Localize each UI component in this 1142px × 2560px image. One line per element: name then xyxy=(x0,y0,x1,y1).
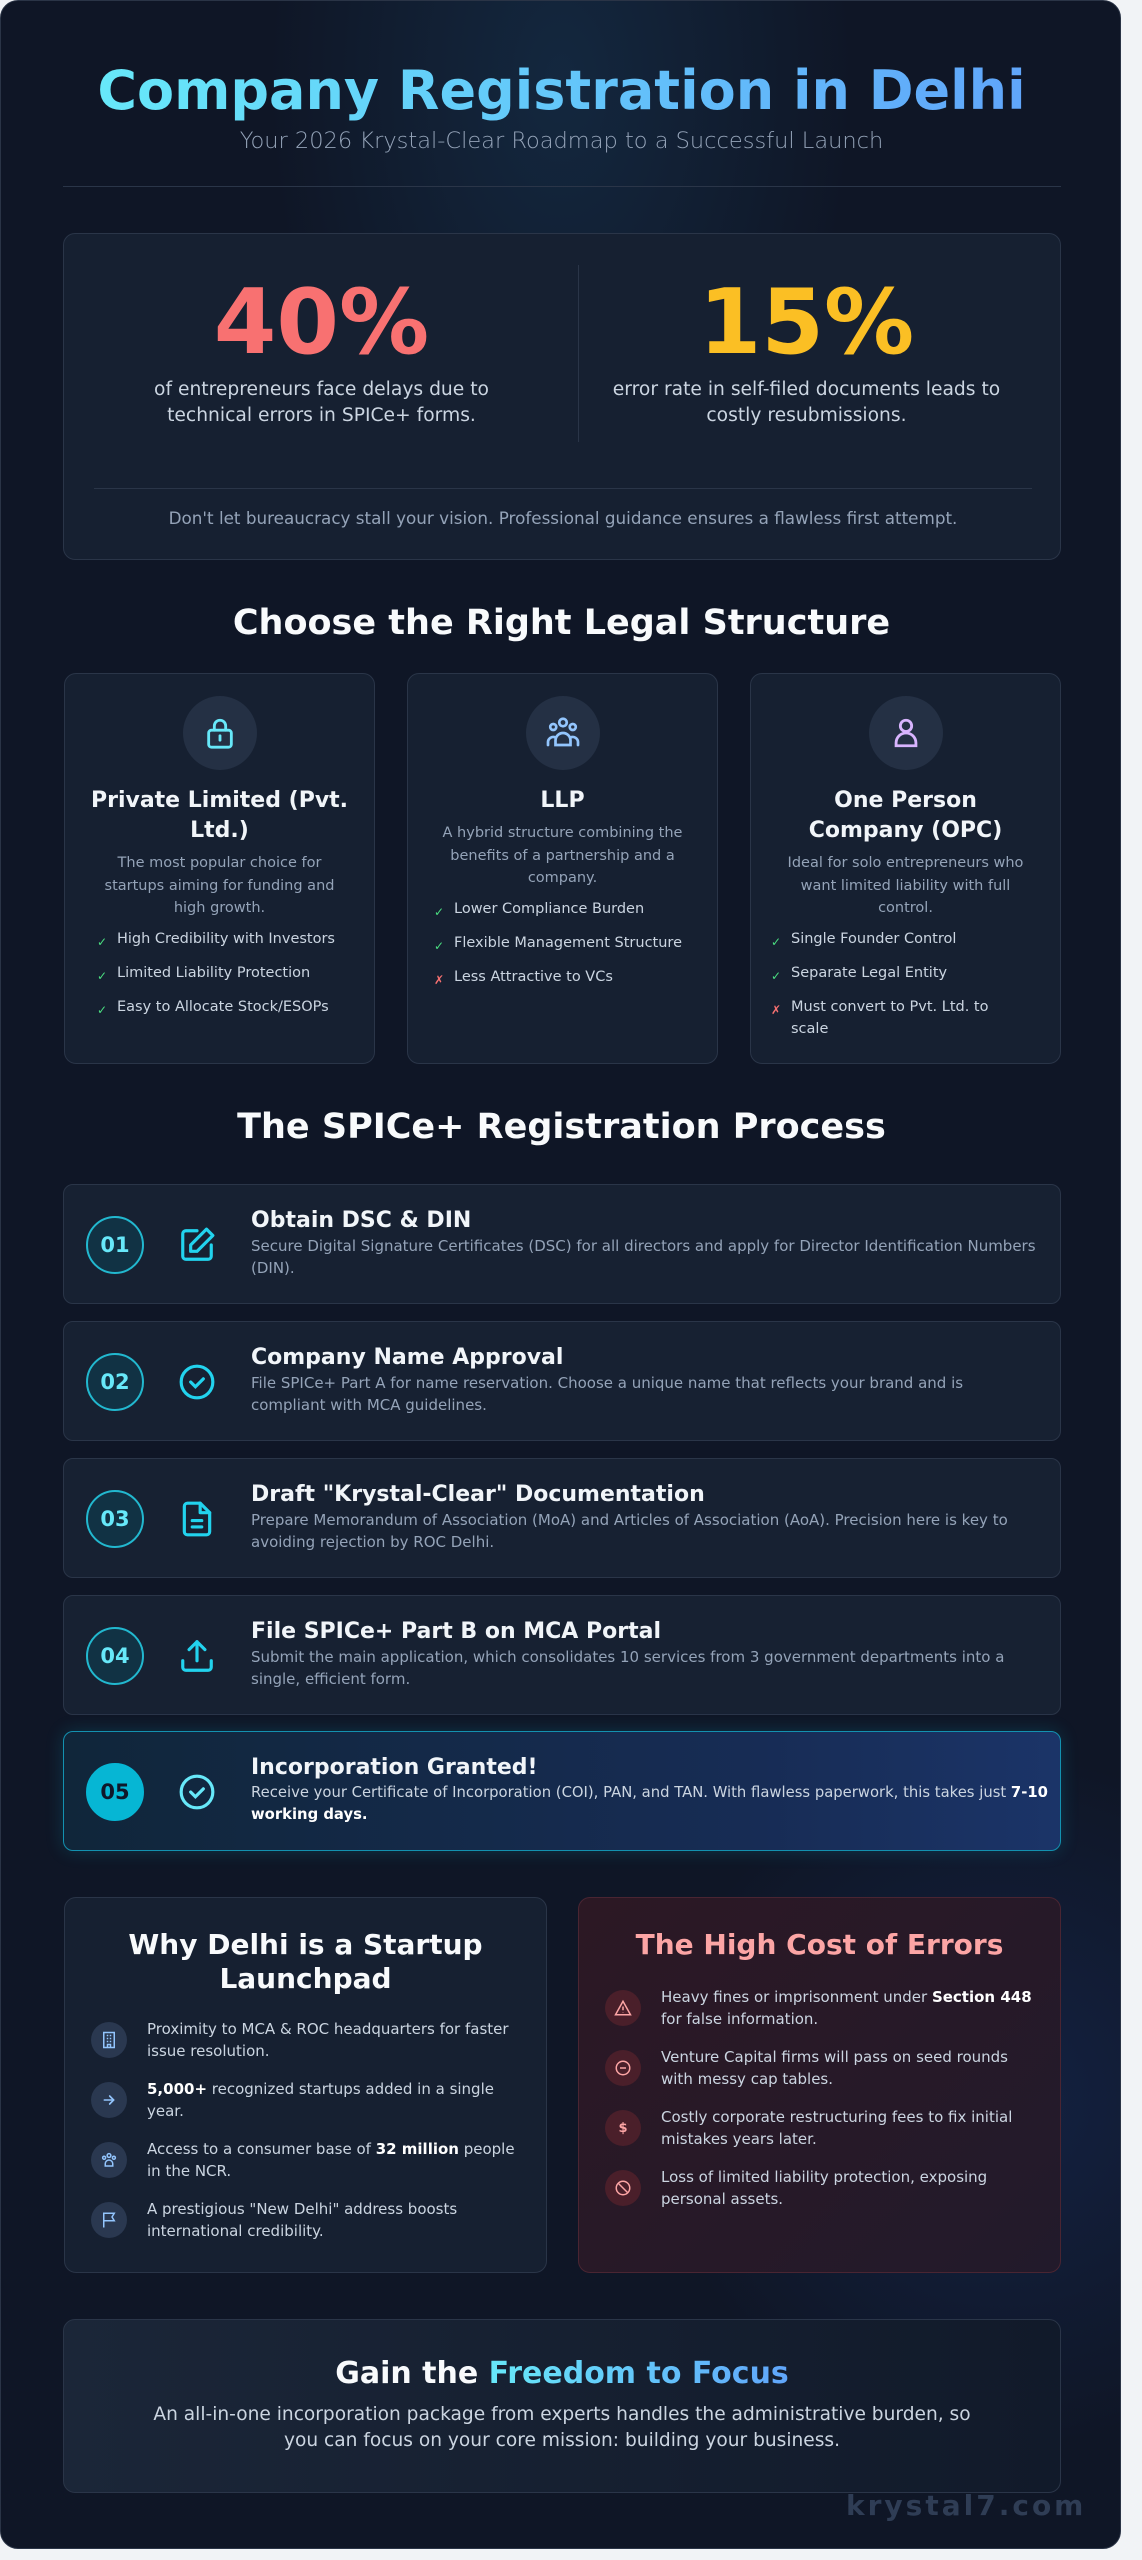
card: LLP: Lower Compliance Burden xyxy=(454,900,644,916)
watermark: krystal7.com xyxy=(846,2489,1086,2522)
step 1: Obtain DSC & DIN xyxy=(251,1208,471,1233)
heading: legal structure: Choose the Right Legal Structure xyxy=(233,603,890,643)
card: LLP: ✓ xyxy=(434,938,444,952)
item: consumer base: Access to a consumer base of 32 million people in the NCR. xyxy=(147,2140,515,2180)
step 2 xyxy=(63,1321,1061,1441)
card: OPC: Must convert to Pvt. Ltd. to scale xyxy=(791,998,988,1036)
item: restructuring: Costly corporate restructuring fees to fix initial mistakes years later. xyxy=(661,2108,1012,2148)
card: OPC: ✓ xyxy=(771,968,781,982)
item: VC: Venture Capital firms will pass on seed rounds with messy cap tables. xyxy=(661,2048,1008,2088)
panel: why Delhi xyxy=(64,1897,547,2273)
icon: check circle xyxy=(180,1774,214,1810)
panel: cost of errors: The High Cost of Errors xyxy=(636,1928,1003,1961)
subtitle: Your 2026 Krystal-Clear Roadmap to a Successful Launch xyxy=(240,128,883,154)
step 4: Submit the main application, which consolidates 10 services from 3 government departments into a single, efficient form. xyxy=(251,1648,1004,1688)
step 2: Company Name Approval xyxy=(251,1345,563,1370)
stat: 15%: costly resubmissions. xyxy=(706,405,907,426)
card: LLP: Flexible Management Structure xyxy=(454,934,682,950)
card: OPC: Separate Legal Entity xyxy=(791,964,947,980)
item: proximity: Proximity to MCA & ROC headquarters for faster issue resolution. xyxy=(147,2020,509,2060)
step 1 xyxy=(63,1184,1061,1304)
panel: statistics xyxy=(63,233,1061,560)
item: startups: 5,000+ recognized startups added in a single year. xyxy=(147,2080,494,2120)
step 2: File SPICe+ Part A for name reservation. Choose a unique name that reflects your brand and is compliant with MCA guidelines. xyxy=(251,1374,963,1414)
stat: 40% xyxy=(154,270,489,426)
stat: 40%: 40% xyxy=(214,270,429,375)
stat: 15%: error rate in self-filed documents leads to xyxy=(613,379,1000,400)
heading: process: The SPICe+ Registration Process xyxy=(237,1107,886,1147)
icon: person xyxy=(869,696,943,770)
step 5: Incorporation Granted! xyxy=(251,1755,538,1780)
title: Company Registration in Delhi xyxy=(97,59,1026,122)
item: address: A prestigious "New Delhi" address boosts international credibility. xyxy=(147,2200,457,2240)
icon: upload xyxy=(181,1640,213,1672)
step 4 xyxy=(63,1595,1061,1715)
stat: 15%: 15% xyxy=(699,270,914,375)
card: private limited: Private Limited (Pvt. Ltd.) xyxy=(91,788,348,843)
icon: check circle xyxy=(180,1364,214,1400)
icon: group xyxy=(526,696,600,770)
item: liability: Loss of limited liability protection, exposing personal assets. xyxy=(661,2168,987,2208)
card: private limited: High Credibility with Investors xyxy=(117,930,335,946)
icon: lock xyxy=(183,696,257,770)
card: LLP: A hybrid structure combining the benefits of a partnership and a company. xyxy=(443,825,682,886)
step 3: Draft "Krystal-Clear" Documentation xyxy=(251,1482,705,1507)
stat: 15% xyxy=(613,270,1000,426)
step 1: 01 xyxy=(100,1233,130,1257)
footer note: Don't let bureaucracy stall your vision. Professional guidance ensures a flawless first attempt. xyxy=(169,508,957,528)
card: private limited: ✓ xyxy=(97,1002,107,1016)
card: private limited: The most popular choice for startups aiming for funding and high growth. xyxy=(105,855,334,916)
card: private limited: Easy to Allocate Stock/ESOPs xyxy=(117,998,329,1014)
card: private limited: ✓ xyxy=(97,968,107,982)
card: private limited: ✓ xyxy=(97,934,107,948)
stat: 40%: of entrepreneurs face delays due to xyxy=(154,379,489,400)
card: private limited xyxy=(64,673,375,1064)
icon: document xyxy=(182,1502,212,1536)
card: OPC: One Person Company (OPC) xyxy=(809,788,1002,843)
stat: 40%: technical errors in SPICe+ forms. xyxy=(167,405,476,426)
card: LLP xyxy=(407,673,718,1064)
panel: CTA: Gain the Freedom to Focus xyxy=(335,2356,789,2391)
card: LLP: Less Attractive to VCs xyxy=(454,968,613,984)
step 5: Receive your Certificate of Incorporation (COI), PAN, and TAN. With flawless paperwork, this takes just 7-10 working days. xyxy=(251,1784,1048,1823)
card: OPC: ✗ xyxy=(771,1002,781,1016)
card: LLP: LLP xyxy=(540,788,585,813)
panel: CTA: An all-in-one incorporation package from experts handles the administrative burden, so you can focus on your core mission: building your business. xyxy=(153,2404,971,2451)
item: restructuring: $ xyxy=(618,2120,628,2136)
step 4: File SPICe+ Part B on MCA Portal xyxy=(251,1619,661,1644)
step 2: 02 xyxy=(100,1370,130,1394)
step 3 xyxy=(63,1458,1061,1578)
card: LLP: ✗ xyxy=(434,972,444,986)
step 1: Secure Digital Signature Certificates (DSC) for all directors and apply for Director Identification Numbers (DIN). xyxy=(251,1237,1036,1277)
step 3: 03 xyxy=(100,1507,130,1531)
panel: why Delhi: Why Delhi is a Startup Launchpad xyxy=(128,1928,483,1995)
card: private limited: Limited Liability Protection xyxy=(117,964,310,980)
card: LLP: ✓ xyxy=(434,904,444,918)
card: OPC: ✓ xyxy=(771,934,781,948)
card: OPC: Ideal for solo entrepreneurs who want limited liability with full control. xyxy=(788,855,1023,916)
step 3: Prepare Memorandum of Association (MoA) and Articles of Association (AoA). Precision here is key to avoiding rejection by ROC Delhi. xyxy=(251,1511,1008,1551)
panel: cost of errors xyxy=(578,1897,1061,2273)
icon: pen xyxy=(181,1228,214,1261)
step 5: 05 xyxy=(100,1780,130,1804)
card: OPC: Single Founder Control xyxy=(791,930,956,946)
panel: CTA xyxy=(63,2319,1061,2493)
step 4: 04 xyxy=(100,1644,130,1668)
card: OPC xyxy=(750,673,1061,1064)
step 5 xyxy=(63,1731,1061,1851)
item: fines: Heavy fines or imprisonment under Section 448 for false information. xyxy=(661,1988,1032,2028)
